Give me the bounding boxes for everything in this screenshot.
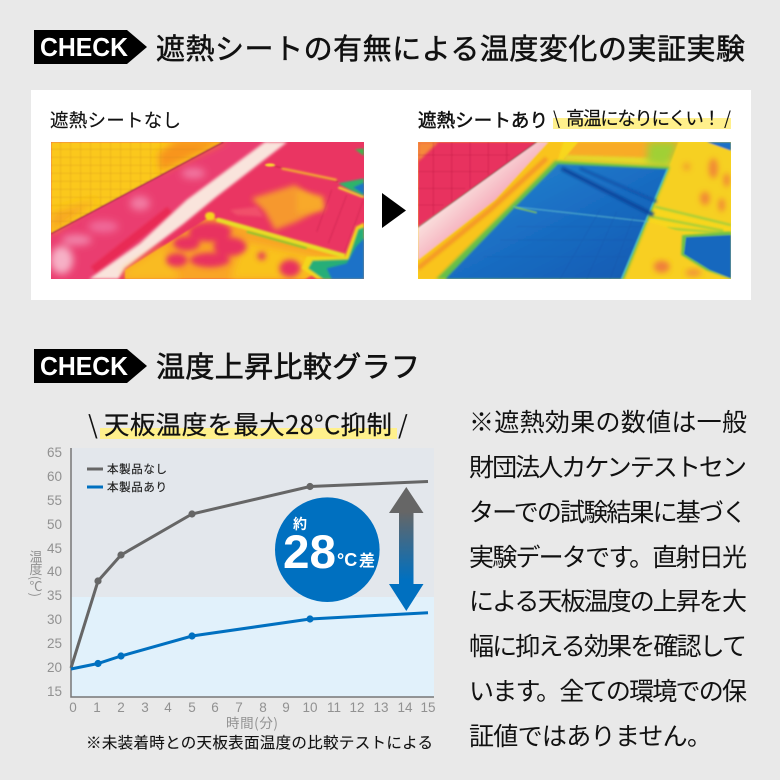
y axis labels: 15 [47, 684, 62, 699]
check tag 1: CHECK [40, 32, 128, 62]
x axis labels: 6 [211, 700, 219, 715]
x axis labels: 14 [397, 700, 413, 715]
upper roof edge [270, 165, 338, 182]
callout: hard to heat: 高温になりにくい！ [566, 105, 721, 131]
blue roof [436, 161, 670, 279]
label: without sheet: 遮熱シートなし [50, 107, 181, 133]
chart heading: \ [88, 406, 98, 442]
y axis labels: 20 [47, 660, 62, 675]
badge: 28 degree difference: 28 [283, 525, 336, 578]
axes [71, 448, 434, 697]
x axis labels: 1 [93, 700, 101, 715]
middle roof [252, 185, 325, 230]
text block: disclaimer: 実験データです。直射日光 [469, 538, 747, 574]
y axis labels: 40 [47, 564, 62, 579]
x axis labels: 5 [188, 700, 196, 715]
right roof [655, 142, 731, 225]
x axis labels [69, 700, 436, 715]
x axis labels: 2 [117, 700, 125, 715]
text block: disclaimer: 財団法人カケンテストセン [469, 448, 747, 484]
y axis labels: 35 [47, 588, 62, 603]
text block: disclaimer: による天板温度の上昇を大 [469, 582, 747, 618]
x axis labels: 8 [259, 700, 267, 715]
series: without product [71, 482, 428, 668]
x axis labels: 13 [373, 700, 389, 715]
plot background [71, 448, 434, 597]
badge: 28 degree difference: 差 [359, 547, 375, 571]
text block: disclaimer: ※遮熱効果の数値は一般 [469, 403, 747, 439]
thermal image: with sheet [418, 142, 731, 279]
text block: disclaimer [469, 403, 747, 753]
x axis labels: 15 [420, 700, 436, 715]
y axis labels: 55 [47, 493, 62, 508]
footnote: ※未装着時との天板表面温度の比較テストによる [86, 731, 433, 753]
text block: disclaimer: います。全ての環境での保 [469, 672, 747, 708]
callout: hard to heat: / [724, 105, 731, 131]
panel: thermal images [31, 90, 751, 300]
title 2: 温度上昇比較グラフ [156, 344, 420, 386]
arrow: temperature gap [389, 487, 424, 611]
text block: disclaimer: 幅に抑える効果を確認して [469, 627, 747, 663]
x axis labels: 7 [235, 700, 243, 715]
text block: disclaimer: 証値ではありません。 [469, 717, 712, 753]
y axis labels: 50 [47, 517, 62, 532]
y axis title: 温度(℃) [26, 550, 46, 597]
lower roof [125, 217, 345, 279]
legend: 本製品あり [107, 479, 167, 495]
legend: 本製品なし [107, 461, 167, 477]
text block: disclaimer: ターでの試験結果に基づく [469, 493, 747, 529]
series: with product [71, 613, 428, 669]
x axis labels: 0 [69, 700, 77, 715]
chart heading: 天板温度を最大28°C抑制 [104, 405, 392, 442]
x axis labels: 10 [302, 700, 318, 715]
title 1: 遮熱シートの有無による温度変化の実証実験 [156, 26, 745, 68]
heading: graph [34, 344, 420, 386]
x axis labels: 12 [349, 700, 365, 715]
badge: 28 degree difference: °C [337, 550, 357, 570]
lower right [622, 222, 731, 279]
x axis title: 時間(分) [226, 712, 278, 732]
x axis labels: 4 [164, 700, 172, 715]
check tag 2: CHECK [40, 351, 128, 381]
top roof [563, 142, 678, 166]
y axis labels: 60 [47, 469, 62, 484]
line chart [26, 445, 436, 732]
y axis labels: 45 [47, 541, 62, 556]
y axis labels: 65 [47, 445, 62, 460]
y axis labels: 30 [47, 612, 62, 627]
x axis labels: 3 [141, 700, 149, 715]
top right cool area [338, 178, 364, 196]
chart heading: / [398, 406, 408, 442]
label: with sheet: 遮熱シートあり [418, 107, 548, 133]
callout: hard to heat: \ [553, 105, 560, 131]
heading: thermal comparison [34, 26, 745, 68]
x axis labels: 9 [282, 700, 290, 715]
arrow: comparison [382, 193, 406, 228]
thermal image: without sheet [51, 142, 364, 279]
y axis labels [47, 445, 62, 699]
y axis labels: 25 [47, 636, 62, 651]
x axis labels: 11 [327, 700, 341, 715]
badge: 28 degree difference [275, 497, 380, 602]
badge: 28 degree difference: 約 [293, 514, 307, 534]
legend [87, 461, 167, 495]
